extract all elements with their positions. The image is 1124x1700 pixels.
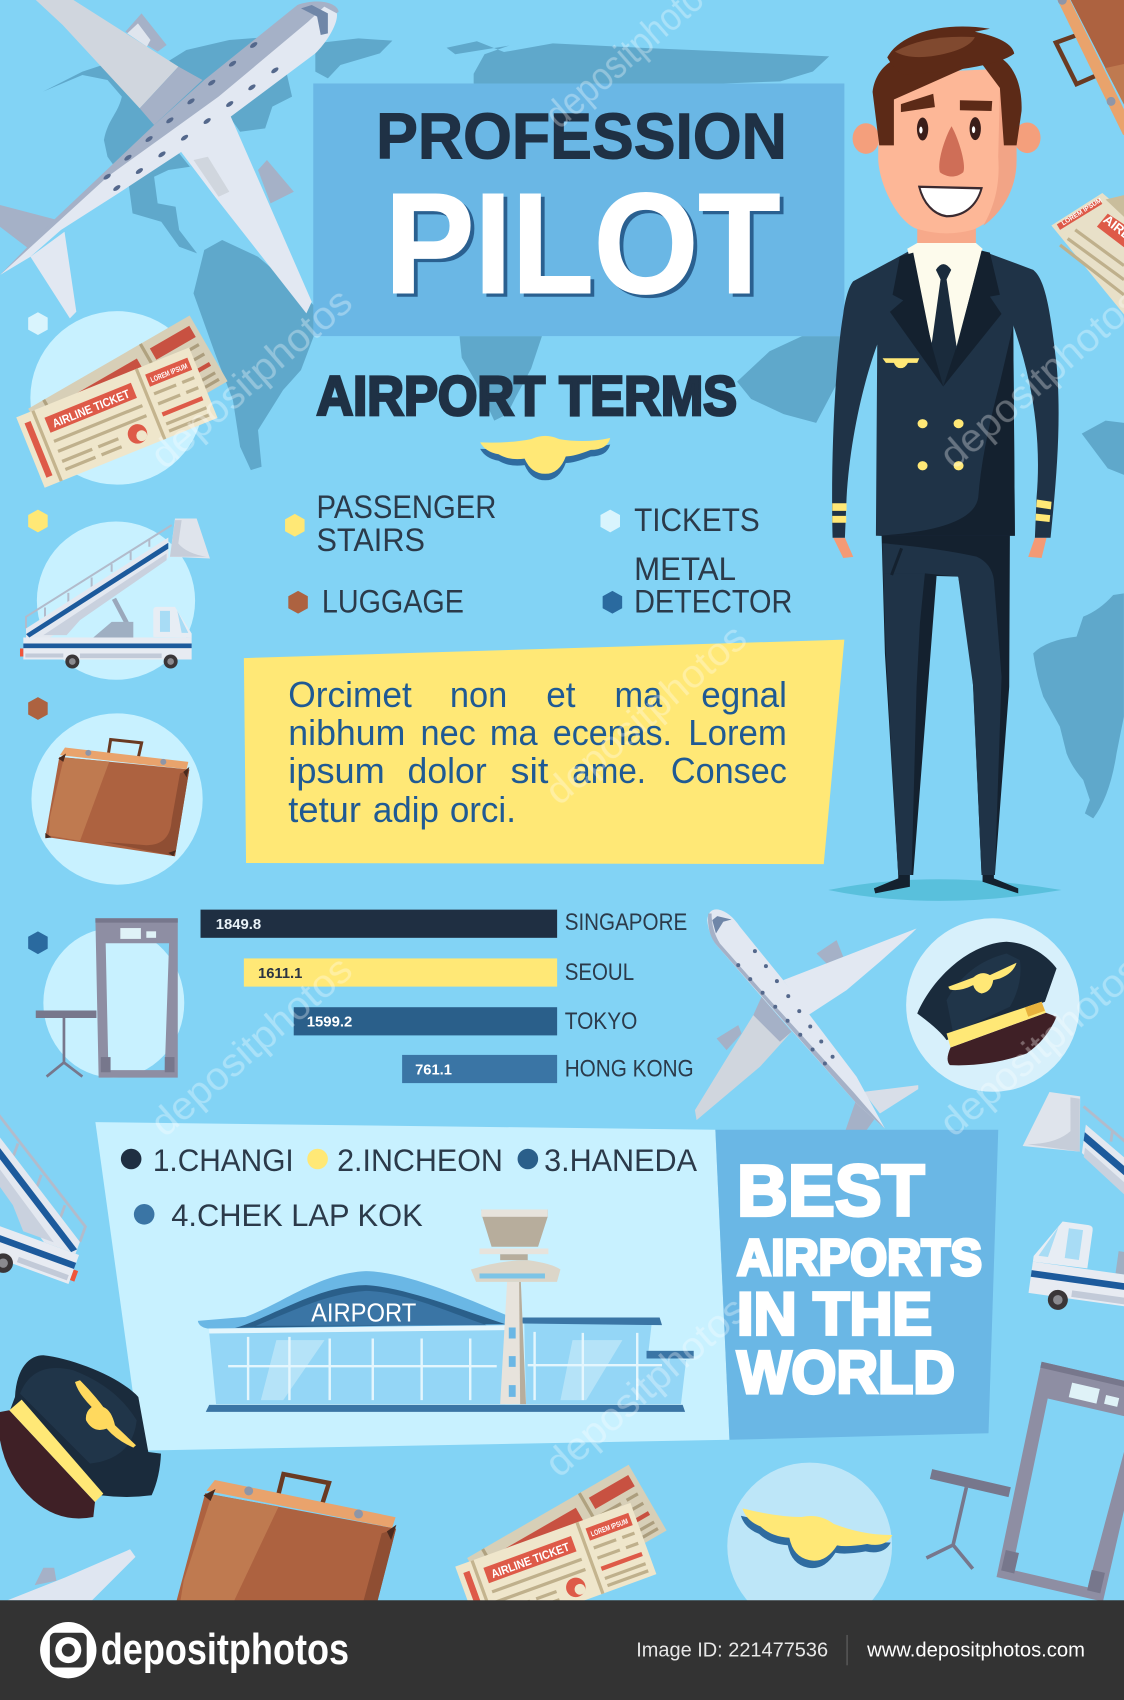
term: metal detector <box>603 551 792 620</box>
illustration: airport building: AIRPORT <box>311 1298 416 1328</box>
callout text: ma <box>490 713 538 753</box>
heading: best airports in the world <box>737 1150 982 1406</box>
callout text <box>288 675 787 830</box>
bar chart: passengers by city: 1849.8 <box>216 916 261 933</box>
callout text: orci. <box>450 790 516 830</box>
map: americas <box>43 37 392 470</box>
legend: airports: 1.CHANGI <box>153 1143 294 1178</box>
icon: ticket top-right: LOREM IPSUM <box>1061 197 1103 227</box>
ground shadow and legs <box>828 535 1062 901</box>
icon: passenger stairs right <box>1001 1089 1124 1340</box>
icon: pilot wings <box>480 436 610 480</box>
callout text: nibhum <box>288 713 405 753</box>
callout text: adip <box>373 790 439 830</box>
callout text: Lorem <box>688 713 787 753</box>
icon: passenger stairs fragment left <box>0 1009 140 1297</box>
heading: best airports in the world: WORLD <box>737 1338 955 1406</box>
icon: metal detector bottom-right <box>912 1362 1124 1602</box>
watermarks: depositphotos <box>537 1288 755 1486</box>
bar chart: passengers by city: SEOUL <box>565 959 634 986</box>
icon: tickets left: AIRLINE TICKET <box>50 386 132 431</box>
icon: pilot cap bottom-left <box>0 1355 161 1518</box>
icon: tickets bottom <box>455 1465 667 1638</box>
legend: airports: 4.CHEK LAP KOK <box>171 1198 423 1233</box>
map: eurasia top <box>447 41 829 85</box>
icon: airplane centre <box>695 909 918 1130</box>
term: tickets: TICKETS <box>634 502 760 538</box>
bar chart: passengers by city: TOKYO <box>565 1008 637 1035</box>
world map <box>43 37 1124 818</box>
illustration: airport building <box>198 1209 694 1412</box>
watermarks <box>142 0 1124 1486</box>
icon: airplane top-left <box>0 0 339 318</box>
callout text: dolor <box>408 751 487 791</box>
legend: airports: 3.HANEDA <box>544 1143 697 1178</box>
icon: tickets bottom: AIRLINE TICKET <box>489 1540 572 1581</box>
callout: yellow text panel <box>244 640 844 864</box>
bar chart: passengers by city: 761.1 <box>415 1061 452 1078</box>
icon: pilot cap in circle <box>917 942 1057 1065</box>
footer url: www.depositphotos.com <box>866 1639 1085 1662</box>
term: passenger stairs <box>285 489 496 558</box>
legend: airports: 2.INCHEON <box>337 1143 503 1178</box>
icon: tickets left <box>16 315 228 488</box>
callout text: non <box>450 675 507 715</box>
bar chart: passengers by city: 1611.1 <box>258 965 302 982</box>
watermarks: depositphotos <box>537 616 755 813</box>
term: metal detector: DETECTOR <box>634 584 792 620</box>
heading: best airports in the world: AIRPORTS <box>737 1229 982 1286</box>
icon: pilot wings in circle <box>733 1501 893 1583</box>
callout text: tetur <box>288 790 361 830</box>
panel: best airports <box>95 1122 998 1451</box>
watermarks: depositphotos <box>142 280 360 477</box>
bar chart: passengers by city <box>201 909 694 1083</box>
callout text: Consec <box>671 751 787 791</box>
upper body and head <box>832 27 1059 558</box>
airport terms list <box>285 489 792 620</box>
term: metal detector: METAL <box>634 551 736 587</box>
bar chart: passengers by city: 1599.2 <box>307 1014 352 1031</box>
callout text: egnal <box>701 675 787 715</box>
footer logo text: depositphotos <box>101 1626 349 1674</box>
term: passenger stairs: PASSENGER <box>316 489 496 525</box>
map: australia <box>1033 593 1124 818</box>
watermarks: depositphotos <box>142 948 360 1145</box>
footer band <box>0 1600 1124 1700</box>
heading: best airports in the world: IN THE <box>737 1280 932 1348</box>
bar chart: passengers by city: SINGAPORE <box>565 909 687 936</box>
icon: airplane fragment bottom-left <box>8 1549 135 1600</box>
callout text: ecenas. <box>553 713 672 753</box>
callout text: ma <box>615 675 662 715</box>
callout text: nec <box>421 713 476 753</box>
title: profession: PROFESSION <box>376 99 787 172</box>
icon: camera logo <box>40 1622 96 1678</box>
icon: suitcase bottom <box>172 1466 400 1657</box>
callout text: sit <box>511 751 549 791</box>
icon: metal detector left <box>36 918 178 1078</box>
callout text: Orcimet <box>288 675 412 715</box>
hexagon markers <box>28 312 48 954</box>
callout text: et <box>546 675 576 715</box>
legend: airports <box>121 1143 697 1233</box>
title panel <box>313 83 844 336</box>
bar chart: passengers by city: HONG KONG <box>565 1056 694 1083</box>
title: pilot: PILOT <box>385 164 780 324</box>
icon: passenger stairs left <box>20 518 210 668</box>
icon: tickets left: LOREM IPSUM <box>149 361 189 384</box>
term: passenger stairs: STAIRS <box>316 522 425 558</box>
decorative circles <box>30 311 1080 1630</box>
callout text: ame. <box>572 751 646 791</box>
heading: airport terms: AIRPORT TERMS <box>316 365 737 427</box>
icon: ticket top-right <box>1051 193 1124 314</box>
icon: suitcase left <box>45 740 189 856</box>
heading: best airports in the world: BEST <box>737 1150 925 1231</box>
icon: suitcase top-right <box>1014 0 1124 166</box>
pilot figure <box>828 27 1062 901</box>
term: luggage: LUGGAGE <box>322 584 464 620</box>
icon: tickets bottom: LOREM IPSUM <box>590 1517 629 1538</box>
callout text: ipsum <box>288 751 385 791</box>
title: pilot: PILOT <box>389 167 784 327</box>
footer image id: Image ID: 221477536 <box>636 1639 828 1662</box>
